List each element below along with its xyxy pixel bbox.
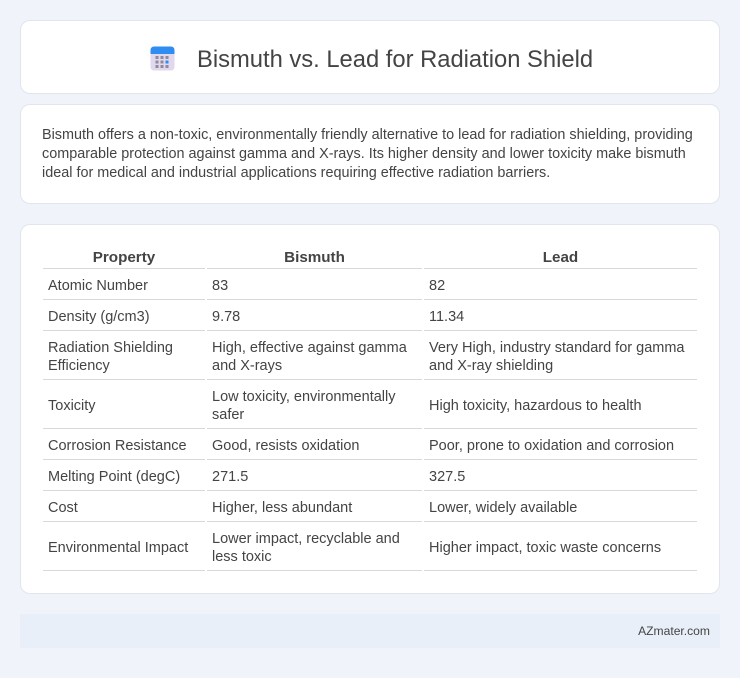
table rows: Good, resists oxidation (212, 438, 360, 454)
table rows: 271.5 (212, 469, 248, 485)
table rows: Lower impact, recyclable and (212, 531, 400, 547)
table rows: Toxicity (48, 398, 96, 414)
table rows: Low toxicity, environmentally (212, 389, 395, 405)
table rows: safer (212, 407, 244, 423)
icon: calendar (150, 46, 174, 70)
table rows: Efficiency (48, 358, 110, 374)
table rows: Radiation Shielding (48, 340, 173, 356)
table rows: 9.78 (212, 309, 240, 325)
table rows: less toxic (212, 549, 272, 565)
table rows: Higher impact, toxic waste concerns (429, 540, 661, 556)
table rows: 82 (429, 278, 445, 294)
table rows: Cost (48, 500, 78, 516)
table rows: and X-rays (212, 358, 282, 374)
header panel (20, 20, 720, 94)
table rows: Very High, industry standard for gamma (429, 340, 684, 356)
table rows: 83 (212, 278, 228, 294)
column headers (93, 249, 578, 266)
comparison table: Lead (543, 249, 578, 266)
table rows: 11.34 (429, 309, 464, 325)
intro text: ideal for medical and industrial applications requiring effective radiation barriers. (42, 165, 550, 181)
intro text (42, 127, 693, 181)
table rows: and X-ray shielding (429, 358, 553, 374)
table rows: Lower, widely available (429, 500, 577, 516)
table panel (20, 224, 720, 594)
table rows: Poor, prone to oxidation and corrosion (429, 438, 674, 454)
footer text: AZmater.com (638, 624, 710, 638)
title: Bismuth vs. Lead for Radiation Shield (197, 46, 593, 73)
footer bar (20, 614, 720, 648)
comparison table: Bismuth (284, 249, 345, 266)
intro text: comparable protection against gamma and X-rays. Its higher density and lower toxicity make bismuth (42, 146, 686, 162)
table rows: Atomic Number (48, 278, 148, 294)
table rows: 327.5 (429, 469, 465, 485)
table rows: Density (g/cm3) (48, 309, 150, 325)
comparison table (43, 249, 697, 571)
table rows: Melting Point (degC) (48, 469, 180, 485)
table rows: Environmental Impact (48, 540, 188, 556)
table rows: High, effective against gamma (212, 340, 407, 356)
table rows: Higher, less abundant (212, 500, 352, 516)
intro text: Bismuth offers a non-toxic, environmentally friendly alternative to lead for radiation shielding, providing (42, 127, 693, 143)
comparison table: Property (93, 249, 155, 266)
table rows: High toxicity, hazardous to health (429, 398, 642, 414)
intro text panel (20, 104, 720, 204)
table rows: Corrosion Resistance (48, 438, 187, 454)
